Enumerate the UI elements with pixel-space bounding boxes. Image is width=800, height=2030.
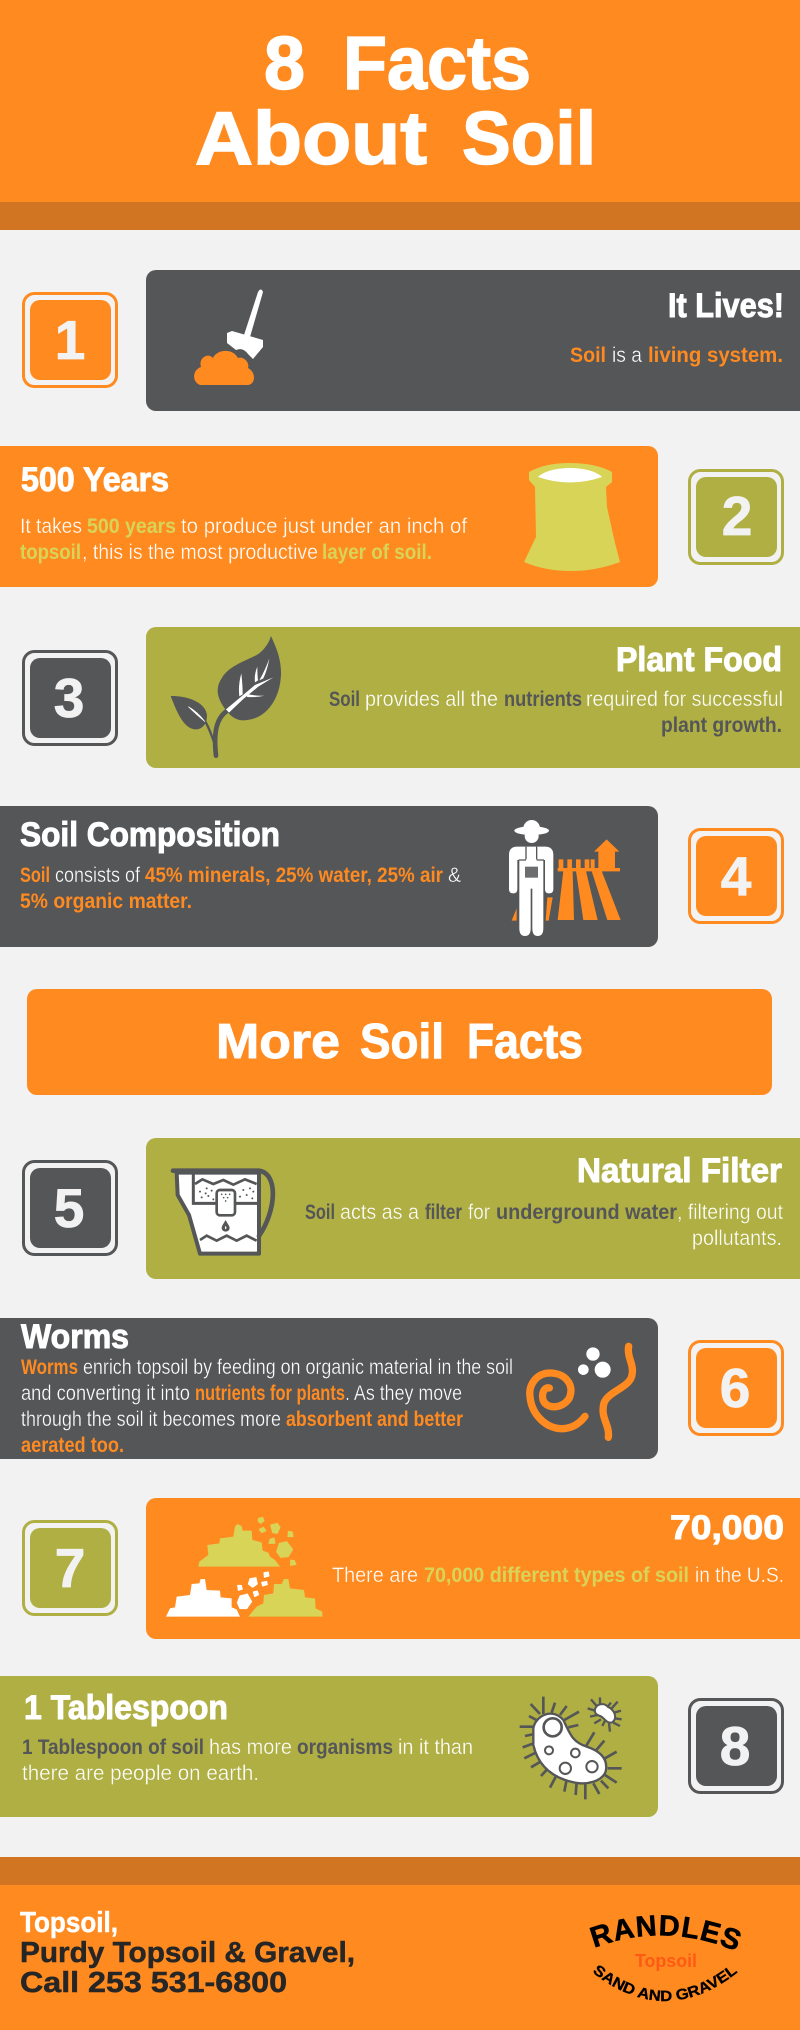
panel: 500 Years <box>0 446 658 587</box>
section banner: More Soil Facts: Soil <box>360 1015 444 1069</box>
icon: farmer and field <box>509 820 621 936</box>
body text: & <box>448 864 461 887</box>
section banner: More Soil Facts <box>27 989 772 1095</box>
logo: Randles Topsoil: Topsoil <box>635 1951 697 1971</box>
logo: Randles Topsoil: SAND AND GRAVEL <box>594 1966 738 2002</box>
heading: Worms <box>21 1318 129 1356</box>
body text <box>329 688 783 737</box>
icon: worms <box>530 1346 632 1437</box>
body text: organisms <box>297 1736 393 1759</box>
heading: 1 Tablespoon <box>24 1689 228 1727</box>
body text: 5% organic matter. <box>20 890 192 913</box>
body text: , filtering out <box>677 1201 783 1224</box>
body text <box>22 1736 473 1785</box>
body text <box>570 344 783 367</box>
body text: pollutants. <box>692 1227 782 1250</box>
number badge 7 <box>24 1522 116 1614</box>
body text <box>20 515 467 564</box>
number badge 5: 5 <box>54 1177 84 1239</box>
body text <box>305 1201 783 1250</box>
title: Facts <box>343 21 531 105</box>
title <box>195 21 596 180</box>
body text: Soil <box>305 1201 335 1224</box>
body text: to produce just under an inch of <box>181 515 467 538</box>
panel: 1 Tablespoon <box>0 1676 658 1817</box>
body text <box>20 864 461 913</box>
body text: absorbent and better <box>286 1408 463 1431</box>
number badge 3: 3 <box>54 667 84 729</box>
body text: 45% minerals, 25% water, 25% air <box>145 864 443 887</box>
body text: required for successful <box>586 688 783 711</box>
body text: through the soil it becomes more <box>21 1408 281 1431</box>
icon: shovel and soil <box>194 290 263 385</box>
body text: there are people on earth. <box>22 1762 259 1785</box>
heading: Soil Composition <box>20 816 280 854</box>
body text: Worms <box>21 1356 78 1379</box>
icon: soil microbes <box>520 1697 622 1799</box>
footer <box>0 1857 800 2030</box>
logo: Randles Topsoil: RANDLES <box>590 1915 741 1950</box>
number badge 6 <box>690 1342 782 1434</box>
panel: Worms <box>0 1318 658 1459</box>
body text: nutrients <box>504 688 582 711</box>
body text: 500 years <box>87 515 176 538</box>
body text: underground water <box>496 1201 677 1224</box>
number badge 8 <box>690 1700 782 1792</box>
icon: soil sack <box>524 463 620 571</box>
heading: 500 Years <box>21 461 169 499</box>
number badge 4 <box>690 830 782 922</box>
heading: Natural Filter <box>577 1152 782 1190</box>
body text: Soil <box>329 688 360 711</box>
body text: consists of <box>55 864 140 887</box>
panel: Plant Food <box>146 627 800 768</box>
header banner <box>0 0 800 230</box>
number badge 6: 6 <box>720 1357 750 1419</box>
number badge 7: 7 <box>55 1537 85 1599</box>
body text: 70,000 different types of soil <box>424 1564 689 1587</box>
panel: 70,000 <box>146 1498 800 1639</box>
title: 8 <box>264 21 305 105</box>
body text: has more <box>209 1736 292 1759</box>
contact text: Call 253 531-6800 <box>20 1967 287 1999</box>
panel: Soil Composition <box>0 806 658 947</box>
title: Soil <box>462 96 596 180</box>
body text: layer of soil. <box>322 541 432 564</box>
body text <box>332 1564 784 1587</box>
number badge 1: 1 <box>55 309 85 371</box>
body text: enrich topsoil by feeding on organic material in the soil <box>83 1356 513 1379</box>
contact text: Purdy Topsoil & Gravel, <box>20 1937 355 1969</box>
body text: acts as a <box>340 1201 419 1224</box>
body text: plant growth. <box>661 714 782 737</box>
body text: Soil <box>20 864 50 887</box>
body text: in the U.S. <box>695 1564 784 1587</box>
number badge 4: 4 <box>721 845 752 907</box>
icon: leaves <box>171 636 281 756</box>
body text: provides all the <box>365 688 498 711</box>
body text: 1 Tablespoon of soil <box>22 1736 204 1759</box>
icon: water filter pitcher <box>173 1171 273 1254</box>
body text: There are <box>332 1564 418 1587</box>
title: About <box>195 96 427 180</box>
body text: It takes <box>20 515 82 538</box>
body text: and converting it into <box>21 1382 190 1405</box>
body text: . As they move <box>345 1382 462 1405</box>
body text: is a <box>612 344 642 367</box>
body text: living system. <box>648 344 783 367</box>
body text: for <box>468 1201 490 1224</box>
body text: topsoil <box>20 541 81 564</box>
heading: 70,000 <box>670 1509 784 1547</box>
body text: filter <box>425 1201 462 1224</box>
panel: Natural Filter <box>146 1138 800 1279</box>
number badge 5 <box>24 1162 116 1254</box>
number badge 3 <box>24 652 116 744</box>
body text <box>21 1356 513 1457</box>
contact text: Topsoil, <box>20 1907 118 1939</box>
number badge 8: 8 <box>720 1715 750 1777</box>
panel: It Lives <box>146 270 800 411</box>
section banner: More Soil Facts: Facts <box>467 1015 583 1069</box>
number badge 1 <box>24 294 116 386</box>
icon: soil piles <box>166 1517 322 1617</box>
heading: Plant Food <box>616 641 782 679</box>
body text: , this is the most productive <box>82 541 318 564</box>
body text: in it than <box>398 1736 473 1759</box>
number badge 2 <box>690 470 782 564</box>
number badge 2: 2 <box>722 485 752 547</box>
section banner: More Soil Facts: More <box>216 1015 340 1069</box>
body text: aerated too. <box>21 1434 124 1457</box>
contact text <box>20 1907 355 1999</box>
body text: Soil <box>570 344 606 367</box>
heading: It Lives! <box>668 287 784 325</box>
logo: Randles Topsoil <box>590 1915 741 2002</box>
body text: nutrients for plants <box>195 1382 345 1405</box>
